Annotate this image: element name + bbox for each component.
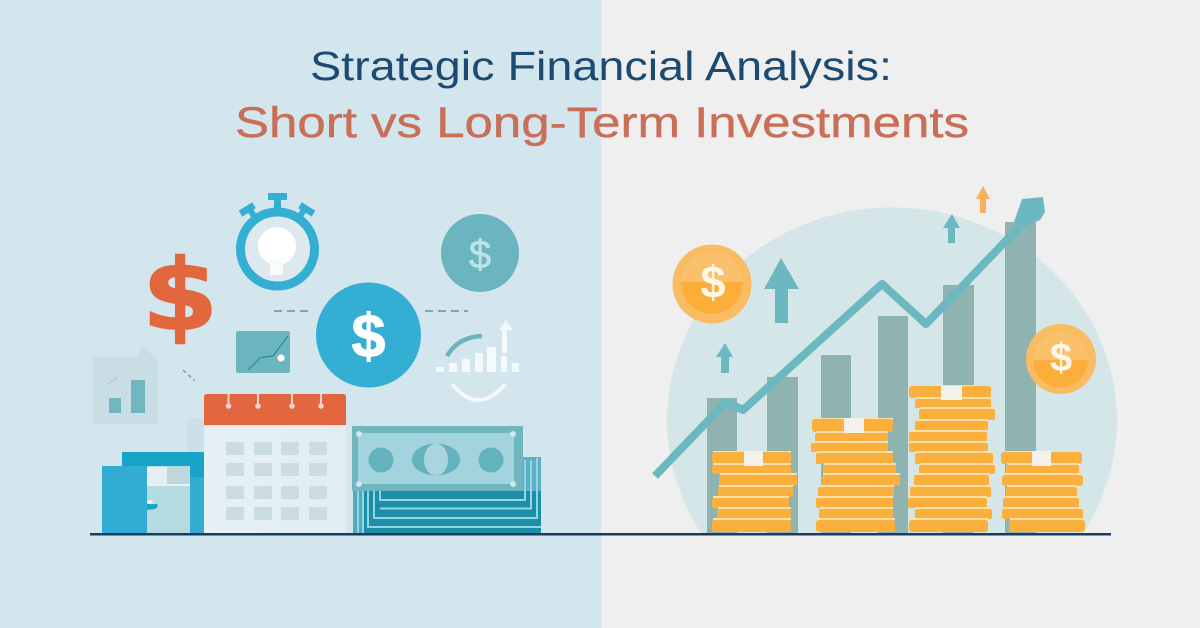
icon: faded house chart (93, 345, 158, 424)
icon: gold dollar coin right: $ (1050, 336, 1072, 380)
icon: calendar (204, 394, 346, 533)
background circle (667, 207, 1117, 533)
coin stack 4 (1001, 451, 1085, 532)
icon: door building (102, 452, 205, 533)
icon: small up arrow (716, 343, 733, 373)
coin stack 2 (811, 418, 900, 532)
icon: red dollar sign: $ (142, 238, 218, 353)
panel: long-term background (601, 0, 1200, 628)
icon: white growth chart (436, 320, 519, 400)
title line 2: Short vs Long-Term Investments (235, 99, 969, 147)
icon: teal up arrow (943, 214, 960, 243)
icon: teal dollar coin (441, 214, 519, 292)
icon: large blue dollar coin (316, 282, 421, 388)
icon: gold dollar coin right (1026, 324, 1096, 394)
icon: large blue dollar coin: $ (352, 302, 386, 370)
icon: teal dollar coin: $ (469, 233, 491, 277)
coin stack 1 (712, 451, 797, 532)
bar chart (707, 222, 1036, 533)
icon: large up arrow (764, 258, 799, 323)
panel: short-term illustration (93, 193, 541, 533)
title line 1: Strategic Financial Analysis: (310, 43, 892, 89)
icon: banknote stack (352, 426, 541, 533)
baseline (90, 533, 1111, 536)
panel: short-term background (0, 0, 601, 628)
panel: long-term illustration (655, 186, 1117, 533)
icon: gold dollar coin left: $ (700, 256, 726, 308)
icon: gold dollar coin left (672, 244, 752, 324)
coin stack 3 (908, 385, 995, 532)
rising trend line (655, 197, 1045, 476)
icon: stopwatch (239, 193, 315, 286)
icon: orange up arrow (976, 186, 990, 213)
icon: chart wallet (236, 331, 290, 373)
title (235, 43, 969, 147)
